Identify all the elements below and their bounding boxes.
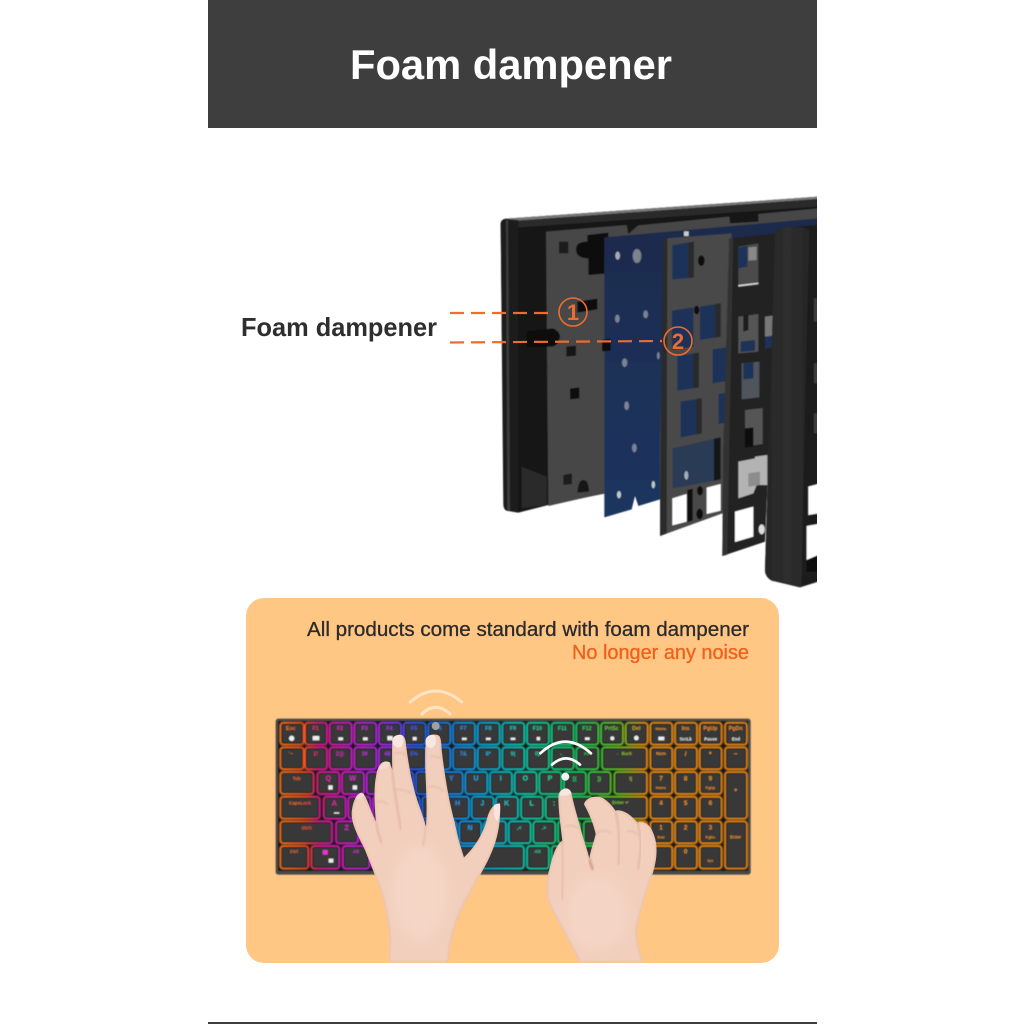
key labels: F5 [411, 726, 417, 732]
key labels: PgUp [706, 786, 716, 790]
key labels: 9 [709, 775, 713, 782]
key labels: PrtSc [605, 726, 619, 732]
icon: sound waves right [540, 742, 591, 765]
key labels: 7 [659, 775, 663, 782]
key labels: [{ [573, 777, 577, 783]
foam dampener plate 1 [527, 208, 818, 506]
label text: Foam dampener [241, 312, 437, 342]
key labels: 0) [535, 751, 540, 757]
marker 2 [664, 327, 692, 355]
keyboard: ScrLk [680, 736, 692, 741]
key labels: 5% [410, 751, 418, 757]
key labels: F11 [558, 726, 567, 732]
key labels: F1 [313, 726, 319, 732]
key labels [286, 726, 743, 863]
key labels: 4 [659, 800, 663, 807]
plate 3 black frame [722, 233, 778, 556]
hand: left [352, 734, 500, 963]
key labels: F4 [386, 726, 392, 732]
key labels: P [548, 776, 553, 783]
key labels: O [523, 776, 529, 783]
leader line 2 [450, 341, 662, 342]
key labels: + [734, 787, 738, 794]
key labels: F12 [582, 726, 592, 732]
keyboard [276, 719, 751, 875]
key labels: .> [542, 826, 546, 832]
marker 1 [559, 298, 587, 326]
key labels: J [480, 800, 484, 807]
hand: right [547, 788, 657, 963]
key labels: Esc [286, 726, 295, 732]
key labels: F9 [510, 726, 516, 732]
key labels: Z [345, 825, 350, 832]
key labels: 5 [684, 800, 688, 807]
marker 1: 1 [567, 300, 579, 325]
key labels: Shift [301, 825, 312, 830]
key labels: W [349, 776, 356, 783]
key labels: / [685, 751, 687, 758]
key labels: Num [656, 751, 666, 756]
key labels: 6 [709, 800, 713, 807]
key labels: Del [632, 726, 641, 732]
panel text: no noise: No longer any noise [572, 642, 749, 664]
key labels: ]} [597, 777, 601, 783]
key labels: Q [326, 776, 332, 783]
key labels: Enter [730, 835, 742, 840]
key labels: F10 [533, 726, 542, 732]
key labels: Y [449, 776, 454, 783]
key labels: ,< [517, 826, 522, 832]
foam dampener plate 2 [660, 233, 732, 536]
key labels: * [709, 750, 712, 759]
key labels: PgUp [703, 726, 718, 732]
callout: foam dampener label [241, 298, 692, 355]
key labels: : [553, 800, 555, 807]
key labels: \| [629, 776, 633, 782]
keyboard: Pause [704, 736, 718, 741]
key labels: K [504, 800, 509, 807]
fingernails [355, 735, 500, 821]
key labels: F3 [362, 726, 368, 732]
key labels: Alt [535, 849, 541, 854]
key labels: 3# [362, 751, 368, 757]
key labels: 8 [684, 775, 688, 782]
key labels: F6 [436, 726, 442, 732]
key labels: Alt [353, 849, 360, 854]
key labels: 7& [460, 751, 467, 757]
marker 2: 2 [672, 329, 684, 354]
panel: keyboard usage [246, 598, 779, 963]
top case [765, 225, 818, 587]
key labels: Enter ↵ [612, 800, 629, 805]
key labels: F7 [460, 726, 466, 732]
key labels: -_ [560, 751, 566, 757]
bottom rule [208, 1022, 817, 1024]
key labels: End [658, 836, 664, 840]
key labels: H [455, 800, 460, 807]
header banner [208, 0, 817, 128]
key labels: =+ [584, 751, 590, 757]
key labels: 3 [709, 825, 713, 832]
icon: press dot right [561, 773, 569, 781]
key labels: Home [655, 726, 667, 731]
key labels: F8 [485, 726, 491, 732]
blue PCB [602, 218, 818, 517]
key labels: `~ [288, 751, 293, 757]
key labels: 4$ [384, 751, 390, 757]
key labels: 1! [313, 751, 318, 757]
key labels: 8* [486, 751, 492, 757]
key labels: I [500, 776, 502, 783]
key labels: Ctrl [290, 849, 298, 854]
exploded keyboard layers diagram [501, 197, 818, 587]
key labels: ← Back [616, 751, 633, 756]
key labels: A [332, 800, 337, 807]
key labels: 9( [511, 751, 516, 757]
key labels: Tab [293, 776, 301, 781]
title: Foam dampener [350, 41, 672, 88]
key labels: Home [656, 786, 666, 790]
key labels: Ins [682, 726, 690, 732]
icon: sound waves left [410, 691, 462, 714]
panel text: standard foam: All products come standard with foam dampener [307, 619, 749, 641]
key labels: − [734, 751, 738, 758]
key labels: N [467, 825, 473, 832]
icon: press dot left [432, 722, 440, 730]
back case [501, 197, 818, 513]
icon: fn glyphs [289, 736, 664, 863]
key labels: U [473, 776, 479, 783]
key labels: L [530, 800, 535, 807]
key labels: 1 [659, 825, 663, 832]
key labels: 2 [684, 825, 688, 832]
key labels: Del [707, 859, 713, 863]
key labels: CapsLock [289, 800, 312, 805]
key labels: F2 [337, 726, 343, 732]
key labels: 2@ [336, 751, 344, 757]
switch [738, 455, 767, 498]
key labels: PgDn [729, 726, 743, 732]
key labels: 0 [684, 848, 688, 855]
leader line 1 [450, 312, 552, 314]
keyboard: End [732, 736, 740, 741]
key labels: PgDn [706, 836, 715, 840]
